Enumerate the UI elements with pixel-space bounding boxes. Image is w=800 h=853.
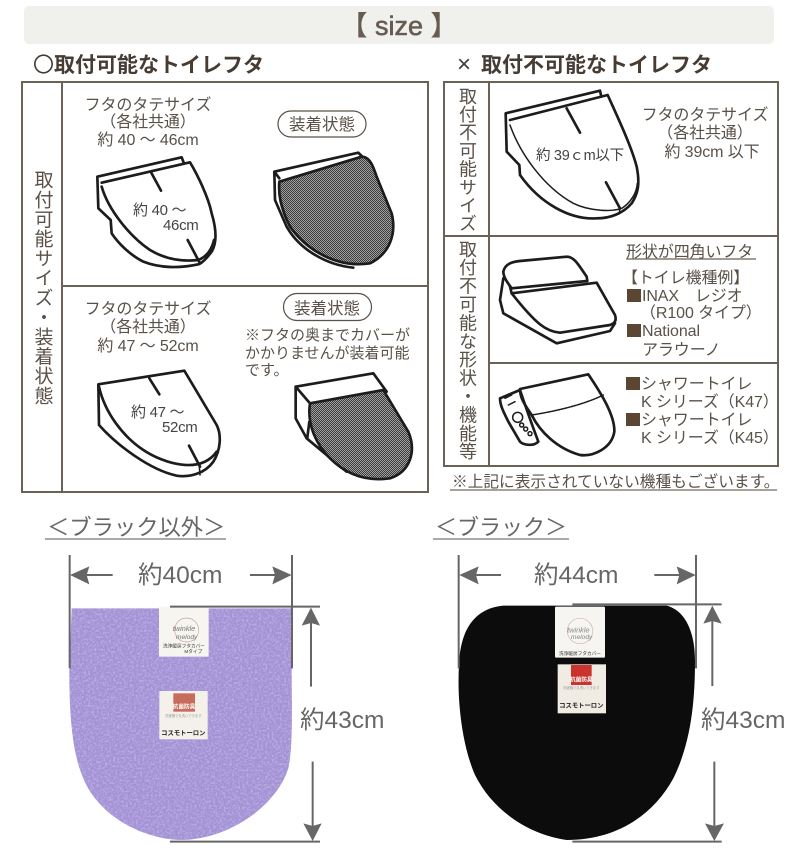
icon: covered lid 40 to 46cm — [274, 153, 393, 268]
tag: brand label: melody — [571, 634, 593, 641]
title bar: size: 【 size 】 — [340, 11, 458, 41]
text: lid length 47 to 52cm: （各社共通） — [100, 318, 196, 336]
dimension: height 43cm: 約43cm — [701, 706, 785, 734]
photo: purple lid cover — [69, 607, 292, 840]
tag: brand label: twinkle — [567, 625, 590, 634]
tag: product label: 抗菌防臭 — [570, 676, 593, 684]
text: shower toilet models: シャワートイレ — [641, 412, 752, 429]
tag: product label: コスモトーロン — [559, 702, 603, 710]
heading: compatible lids: 〇取付可能なトイレフタ — [33, 49, 264, 79]
text: lid length 39cm or less: フタのタテサイズ — [642, 107, 768, 124]
icon: lid 47 to 52cm — [98, 371, 220, 476]
note: cover does not reach the back: ※フタの奥までカバーが — [245, 327, 410, 344]
badge: fitted state with note: 装着状態 — [294, 299, 360, 318]
heading: other than black: ＜ブラック以外＞ — [47, 515, 225, 540]
icon: lid 40 to 46cm — [97, 157, 215, 267]
heading: incompatible lids: × — [457, 51, 471, 78]
icon: washlet lid with side panel — [500, 374, 614, 455]
text: lid length 40 to 46cm: 約 40 ～ 46cm — [97, 131, 199, 149]
text: lid length 47 to 52cm: フタのタテサイズ — [85, 301, 211, 318]
label: 40 to 46cm on lid: 約 40 ～ — [133, 202, 186, 219]
side label: compatible size and fitted state: 取付可能サイズ・装着状態 — [32, 170, 53, 405]
side label: incompatible size: 取付不可能サイズ — [457, 87, 477, 233]
tag: product label — [558, 664, 606, 713]
dimension: width 44cm — [459, 555, 696, 668]
note: cover does not reach the back: です。 — [245, 362, 289, 379]
tag: product label: 洗濯機で丸洗いできます — [563, 685, 600, 690]
tag: product label: 洗濯機で丸洗いできます — [165, 713, 202, 718]
dimension: height 43cm — [170, 607, 384, 842]
label: 40 to 46cm on lid: 46cm — [163, 217, 198, 234]
photo: black lid cover — [459, 606, 695, 840]
dimension: height 43cm — [572, 604, 785, 842]
tag: brand label: melody — [176, 634, 198, 641]
dimension: width 44cm: 約44cm — [534, 561, 618, 589]
text: square lid models: 形状が四角いフタ — [626, 243, 753, 261]
text: shower toilet models: K シリーズ（K47） — [641, 393, 779, 411]
panel: compatible lids table — [22, 82, 428, 492]
tag: brand label: twinkle — [173, 624, 195, 633]
title bar: size — [24, 6, 774, 44]
text: square lid models — [622, 243, 762, 359]
text: square lid models: 【トイレ機種例】 — [622, 269, 749, 287]
text: square lid models: INAX レジオ — [642, 288, 743, 305]
text: square lid models: アラウーノ — [642, 341, 721, 359]
dimension: height 43cm: 約43cm — [300, 706, 384, 734]
badge: fitted state: 装着状態 — [289, 115, 355, 134]
tag: brand label — [555, 607, 605, 658]
tag: brand label: 洗浄暖房フタカバー — [559, 650, 601, 657]
text: lid length 39cm or less: 約 39cm 以下 — [664, 143, 760, 161]
text: shower toilet models — [626, 376, 779, 447]
tag: brand label — [159, 607, 209, 657]
note: cover does not reach the back: かかりませんが装着可能 — [245, 345, 410, 362]
text: lid length 39cm or less: （各社共通） — [657, 124, 753, 142]
text: shower toilet models: K シリーズ（K45） — [641, 429, 779, 447]
icon: covered lid 47 to 52cm — [296, 373, 412, 479]
tag: product label — [159, 691, 208, 739]
text: shower toilet models: シャワートイレ — [641, 376, 752, 393]
side label: incompatible shape and function: 取付不可能な形状・機能等 — [457, 240, 477, 461]
text: square lid models: （R100 タイプ） — [640, 304, 762, 322]
label: 39cm or less on lid: 約 39ｃm以下 — [536, 147, 624, 164]
text: square lid models: National — [642, 323, 700, 340]
dimension: width 40cm: 約40cm — [138, 561, 222, 589]
badge: fitted state with note — [284, 294, 372, 320]
panel: incompatible lids table — [444, 82, 779, 466]
label: 47 to 52cm on lid: 約 47 ～ — [131, 404, 184, 421]
heading: incompatible lids: 取付不可能なトイレフタ — [481, 54, 712, 77]
text: lid length 40 to 46cm: フタのタテサイズ — [85, 97, 211, 114]
note: other models not listed: ※上記に表示されていない機種もございます。 — [452, 472, 779, 491]
text: lid length 47 to 52cm: 約 47 ～ 52cm — [97, 337, 199, 355]
dimension: width 40cm — [70, 555, 292, 668]
text: lid length 40 to 46cm: （各社共通） — [100, 113, 196, 131]
label: 47 to 52cm on lid: 52cm — [162, 419, 197, 436]
heading: black: ＜ブラック＞ — [435, 515, 567, 540]
icon: lid 39cm or less — [506, 91, 638, 218]
tag: brand label: 洗浄暖房フタカバー — [163, 643, 205, 650]
tag: brand label: Mタイプ — [184, 648, 203, 655]
badge: fitted state — [278, 111, 366, 137]
tag: product label: コスモトーロン — [161, 729, 205, 737]
tag: product label: 抗菌防臭 — [173, 702, 196, 710]
icon: square lid — [500, 257, 616, 343]
